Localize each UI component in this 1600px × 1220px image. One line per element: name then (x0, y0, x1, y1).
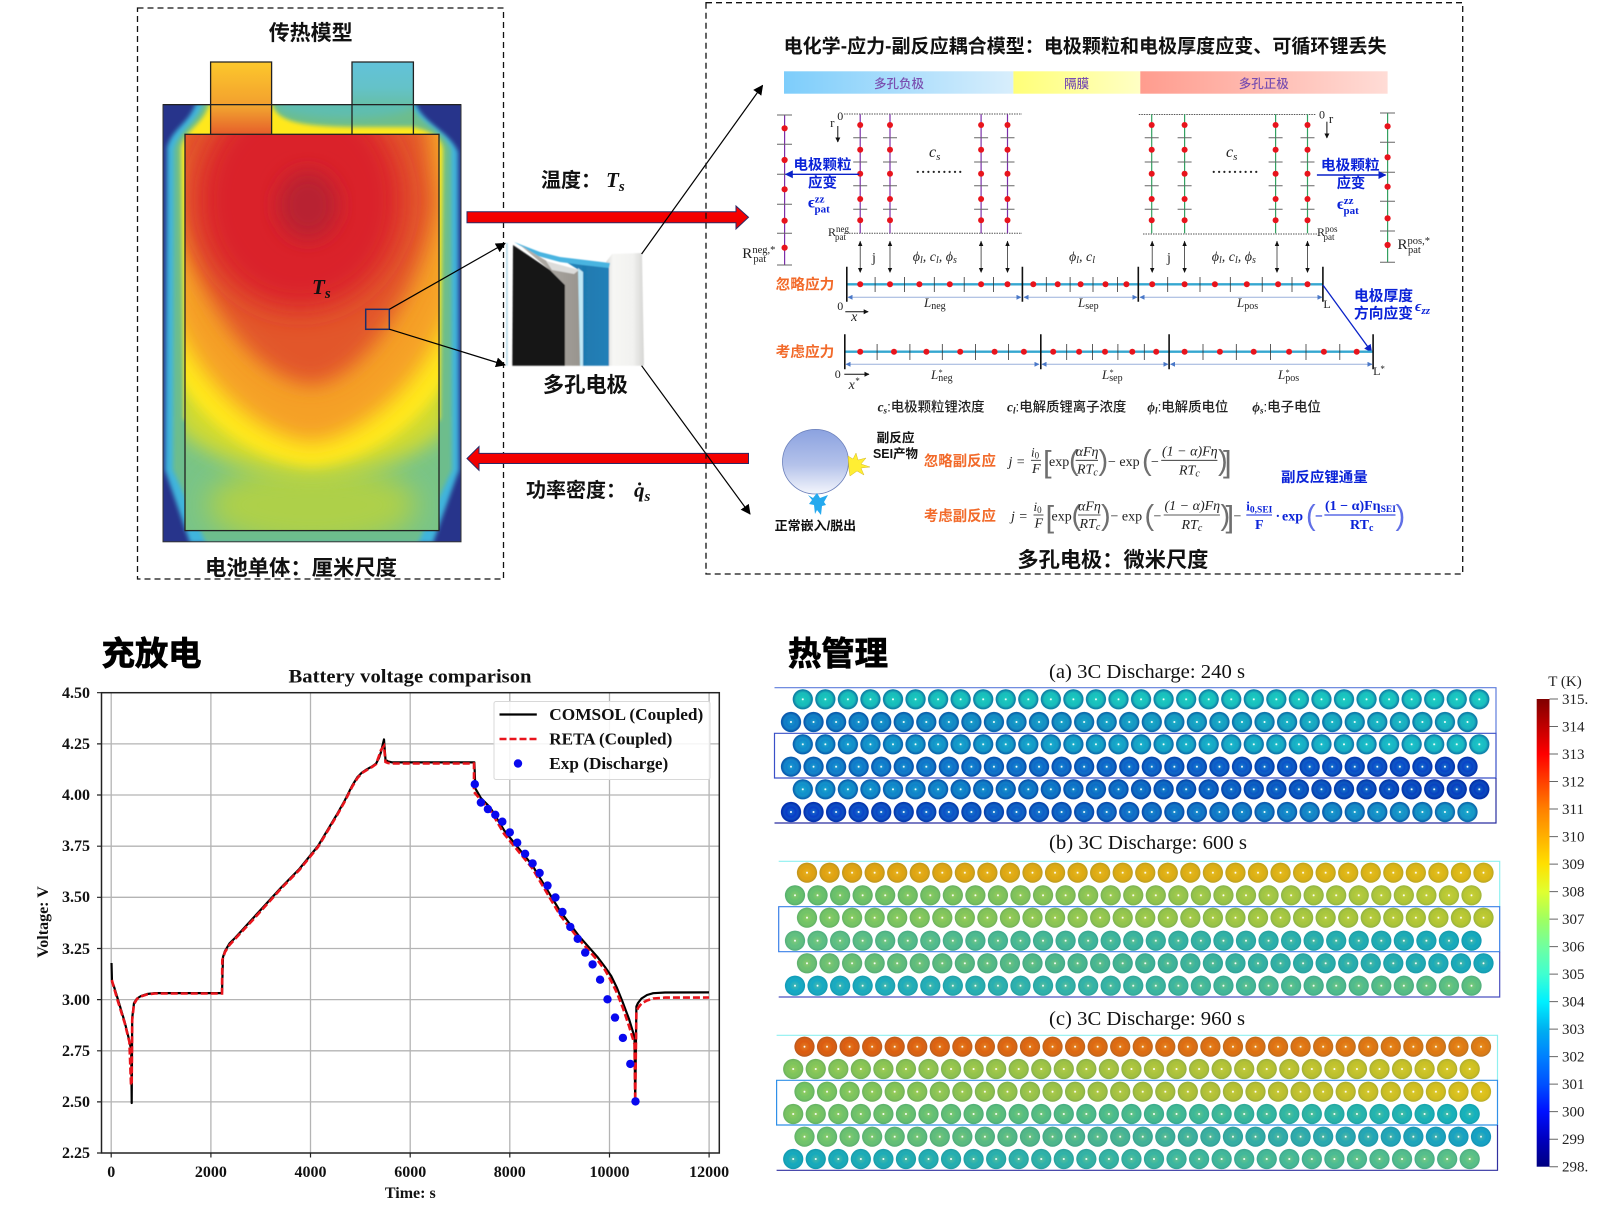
particle domain: positive electrode: pos (1325, 224, 1338, 234)
label: temperature Ts: 温度：T (541, 168, 619, 192)
y axis labels: 3.75 (62, 838, 90, 855)
coupling arrows and variables: , ϕ (939, 250, 953, 265)
cell rows b (784, 862, 1494, 997)
color bar labels: 298. (1562, 1160, 1588, 1176)
axis: electrode thickness with stress: 0 (835, 367, 841, 381)
label: thickness-direction strain: zz (1420, 305, 1431, 317)
equation: without side reaction: − (1108, 455, 1116, 470)
equation: without side reaction: − (1151, 455, 1159, 470)
panel: heat transfer model (138, 8, 504, 580)
axis: electrode thickness with stress: L (1278, 367, 1285, 382)
label: thickness-direction strain: ϵ (1415, 299, 1421, 315)
equation: SEI flux term: − (1315, 510, 1323, 524)
axis: electrode thickness with stress: x (849, 378, 855, 393)
icon: particle with SEI side reaction (775, 429, 918, 533)
label: ignoring side reaction: 忽略副反应 (924, 452, 996, 470)
axis: electrode thickness with stress: * (855, 376, 860, 386)
equation: without side reaction: exp (1049, 455, 1069, 470)
equation: without side reaction: ) (1218, 445, 1228, 477)
axis: electrode thickness without stress: L (1323, 297, 1331, 311)
axis: electrode thickness with stress: sep (1109, 373, 1123, 384)
color bar labels: 307 (1562, 912, 1585, 928)
arrow: temperature to electrode (467, 206, 748, 229)
module frames c (777, 1035, 1498, 1170)
chart legend (494, 702, 710, 780)
axes (97, 693, 719, 1158)
panel border: coupled model (706, 3, 1463, 574)
color bar labels: 304 (1562, 995, 1585, 1011)
icon: particle with SEI side reaction: 副反应 (877, 430, 915, 445)
label: considering stress: 考虑应力 (776, 343, 834, 361)
legend: symbols: c (878, 400, 888, 416)
particle domain: negative electrode: R (742, 246, 752, 262)
particle domain: negative electrode: 电极颗粒 (794, 156, 852, 172)
equation: with side reaction: c (1198, 523, 1203, 534)
legend: symbols: ϕ (1147, 400, 1158, 416)
heading: heat transfer model: 传热模型 (269, 22, 353, 45)
x axis labels: 8000 (494, 1164, 526, 1181)
cell outline (163, 105, 461, 542)
axis: electrode thickness without stress: L (924, 295, 931, 310)
equation: with side reaction: j = (1009, 510, 1028, 524)
module frames b (779, 861, 1500, 997)
arrow: zoom to electrode, top (389, 243, 505, 309)
coupling arrows and variables: j (1166, 251, 1171, 266)
label: power density: s (644, 489, 650, 505)
equation: with side reaction: ) (1101, 500, 1111, 532)
equation: SEI flux term: SEI (1381, 505, 1396, 515)
y axis labels (62, 685, 90, 1162)
color bar labels: 314 (1562, 720, 1585, 736)
equation: with side reaction: ) (1220, 500, 1230, 532)
heading: cell scale: 电池单体：厘米尺度 (205, 557, 397, 580)
equation: SEI flux term: (1 − α)Fη (1325, 499, 1381, 514)
color bar labels: 308 (1562, 885, 1584, 901)
equation: without side reaction: c (1195, 468, 1200, 480)
equation: with side reaction: − (1234, 510, 1242, 524)
axis: electrode thickness with stress: * (1285, 368, 1289, 377)
label: surface temperature Ts: T (312, 275, 325, 299)
label: temperature Ts: s (618, 179, 625, 195)
legend: symbols (878, 398, 1321, 416)
equation: SEI flux term: · (1276, 510, 1280, 524)
label: side reaction lithium flux: 副反应锂通量 (1281, 469, 1368, 485)
heading: thermal management: 热管理 (788, 635, 888, 672)
axis: electrode thickness without stress: pos (1244, 301, 1258, 312)
equation: with side reaction: F (1034, 516, 1044, 532)
particle domain: negative electrode (742, 109, 1022, 265)
axis: electrode thickness with stress: neg (938, 373, 953, 384)
equation: with side reaction: (1 − α)Fη (1164, 499, 1220, 514)
equation: SEI flux term: ) (1396, 500, 1405, 532)
coupling arrows and variables: l (920, 255, 923, 266)
x axis labels: 12000 (689, 1164, 729, 1181)
equation: without side reaction: (1 − α)Fη (1162, 444, 1218, 460)
color bar title: T (K) (1548, 674, 1582, 690)
particle domain: positive electrode: R (1317, 225, 1325, 239)
equation: with side reaction: ( (1072, 500, 1082, 532)
equation: without side reaction: ( (1142, 445, 1152, 477)
color bar labels: 313 (1562, 747, 1584, 763)
color bar labels: 305 (1562, 967, 1584, 983)
series: COMSOL coupled (112, 739, 709, 1103)
heading: charge and discharge: 充放电 (102, 635, 202, 672)
tabs (211, 62, 272, 105)
legend: symbols: :电解质电位 (1158, 398, 1228, 414)
coupling arrows and variables: l (1076, 255, 1079, 266)
color bar: temperature scale (1537, 674, 1588, 1176)
icon: particle with SEI side reaction: SEI产物 (873, 446, 918, 461)
legend: symbols: ϕ (1252, 400, 1264, 416)
equation: without side reaction: 0 (1035, 450, 1040, 460)
title b: (b) 3C Discharge: 600 s (1049, 832, 1247, 854)
y axis labels: 4.00 (62, 787, 90, 804)
label: porous electrode: 多孔电极 (543, 374, 628, 397)
axis: electrode thickness with stress: L (931, 367, 938, 382)
equation: with side reaction: exp (1122, 510, 1142, 524)
equation: without side reaction: αFη (1076, 445, 1099, 460)
chart legend: COMSOL (Coupled) (549, 705, 703, 724)
equation: without side reaction: RT (1077, 462, 1093, 478)
particle domain: negative electrode: zz (815, 194, 825, 206)
equation: with side reaction: RT (1182, 518, 1198, 533)
label: considering side reaction: 考虑副反应 (924, 507, 996, 525)
heading: electrode scale: 多孔电极：微米尺度 (1017, 549, 1208, 572)
color bar labels: 310 (1562, 830, 1584, 846)
equation: with side reaction: 0 (1037, 505, 1042, 515)
particle domain: positive electrode (1139, 108, 1430, 262)
series: RETA coupled (112, 746, 709, 1101)
particle domain: negative electrode: pat (753, 254, 766, 265)
legend: symbols: :电子电位 (1263, 398, 1321, 414)
icon: porous electrode (506, 242, 644, 366)
equation: with side reaction: [ (1046, 499, 1054, 534)
equation: with side reaction: αFη (1078, 500, 1101, 514)
x axis title: Time: s (385, 1185, 436, 1202)
particle domain: negative electrode: 应变 (808, 174, 837, 190)
y axis labels: 2.75 (62, 1043, 90, 1060)
axis: electrode thickness without stress: 0 (837, 299, 843, 313)
x axis labels: 4000 (294, 1164, 326, 1181)
color bar labels: 303 (1562, 1022, 1584, 1038)
equation: with side reaction: i (1034, 499, 1037, 514)
x axis labels: 10000 (590, 1164, 630, 1181)
axis: electrode thickness without stress: L (1237, 295, 1244, 310)
particle domain: positive electrode: 应变 (1337, 175, 1365, 191)
chart title: Battery voltage comparison (288, 666, 532, 688)
equation: with side reaction (1009, 499, 1242, 534)
arrow: electrode to coupled model bottom (642, 366, 750, 514)
y axis labels: 3.25 (62, 941, 90, 958)
color bar labels: 302 (1562, 1050, 1584, 1066)
equation: without side reaction: RT (1179, 464, 1195, 478)
equation: without side reaction: i (1031, 444, 1035, 460)
x axis labels (107, 1164, 729, 1181)
chart: battery voltage comparison (35, 666, 729, 1202)
particle domain: negative electrode: R (828, 225, 836, 239)
particle domain: positive electrode: 电极颗粒 (1321, 157, 1380, 173)
y axis labels: 4.25 (62, 736, 90, 753)
particle domain: positive electrode: pat (1324, 232, 1335, 242)
label: power density: 功率密度： q̇ (526, 478, 644, 502)
particle domain: negative electrode: neg (836, 224, 850, 234)
particle domain: positive electrode: s (1233, 151, 1237, 163)
label: thickness-direction strain (1354, 287, 1431, 322)
region band: negative, separator, positive (784, 71, 1388, 94)
particle domain: negative electrode: pat (835, 232, 847, 242)
particle domain: positive electrode: ......... (1212, 162, 1258, 177)
region band: negative, separator, positive: 多孔正极 (1239, 76, 1289, 91)
coupling arrows and variables: l (936, 255, 939, 266)
color bar labels: 300 (1562, 1105, 1584, 1121)
coupling arrows and variables: , ϕ (1238, 250, 1252, 265)
y axis title: Voltage: V (35, 886, 52, 958)
cell rows a (780, 688, 1490, 823)
particle domain: positive electrode: ϵ (1337, 196, 1344, 213)
panel border: heat transfer model (138, 8, 504, 579)
equation: SEI flux term: exp (1282, 510, 1303, 524)
title c: (c) 3C Discharge: 960 s (1049, 1008, 1245, 1030)
equation: without side reaction: [ (1043, 444, 1052, 479)
equation: SEI flux term: RT (1350, 518, 1369, 533)
label: ignoring stress: 忽略应力 (776, 276, 834, 294)
panel: coupled electrochemical model (706, 3, 1463, 574)
heading: coupled model title: 电化学-应力-副反应耦合模型：电极颗粒和电极厚度应变、可循环锂丢失 (784, 34, 1387, 58)
axis: electrode thickness with stress: * (1380, 364, 1385, 374)
label: surface temperature Ts: s (324, 286, 331, 302)
coupling arrows and variables: ϕ (1069, 250, 1076, 265)
region band: negative, separator, positive: 多孔负极 (874, 76, 924, 91)
x axis labels: 0 (107, 1164, 115, 1181)
axis: electrode thickness without stress: neg (931, 301, 946, 312)
axis: electrode thickness with stress: * (938, 368, 942, 377)
y axis labels: 4.50 (62, 685, 90, 702)
axis: electrode thickness without stress (837, 267, 1331, 325)
particle domain: negative electrode: pat (814, 204, 830, 216)
axis: electrode thickness with stress (835, 334, 1385, 393)
chart legend: Exp (Discharge) (549, 754, 668, 773)
icon: particle with SEI side reaction: 正常嵌入/脱出 (775, 518, 856, 533)
arrow: zoom to electrode, bottom (389, 329, 505, 365)
arrow: power density to cell (467, 447, 748, 470)
legend: symbols: l (1013, 406, 1016, 416)
equation: without side reaction (1006, 444, 1232, 480)
equation: without side reaction: exp (1119, 455, 1140, 470)
equation: with side reaction: ] (1226, 499, 1234, 534)
particle domain: positive electrode: R (1398, 237, 1408, 253)
grid (102, 693, 719, 1153)
equation: without side reaction: j = (1006, 455, 1025, 470)
particle domain: positive electrode: c (1226, 144, 1233, 161)
axis: electrode thickness with stress: L (1373, 364, 1380, 378)
coupling arrows and variables: , c (1079, 250, 1093, 265)
color bar labels: 306 (1562, 940, 1585, 956)
arrow: thickness strain (1323, 285, 1372, 352)
region band: negative, separator, positive: 隔膜 (1064, 76, 1089, 91)
axis: electrode thickness without stress: L (1078, 295, 1085, 310)
particle domain: positive electrode: r (1329, 111, 1334, 126)
particle domain: positive electrode: pos,* (1408, 236, 1430, 247)
equation: SEI flux term: c (1369, 523, 1374, 534)
particle domain: negative electrode: ......... (916, 162, 962, 177)
chart legend: RETA (Coupled) (549, 730, 672, 748)
equation: without side reaction: ] (1223, 444, 1232, 479)
equation: with side reaction: RT (1080, 517, 1096, 532)
particle domain: negative electrode: r (830, 115, 835, 130)
arrow: electrode to coupled model top (642, 86, 762, 254)
axis: electrode thickness without stress: sep (1085, 301, 1099, 312)
cell rows c (782, 1036, 1492, 1170)
particle domain: positive electrode: zz (1344, 195, 1354, 207)
x axis labels: 6000 (394, 1164, 426, 1181)
legend: symbols: l (1155, 406, 1158, 416)
coupling arrows and variables (858, 241, 1310, 273)
panel c: 3C discharge 960 s (777, 1008, 1498, 1170)
equation: without side reaction: ) (1098, 445, 1108, 477)
battery temperature field (163, 62, 461, 547)
particle domain: negative electrode: s (936, 151, 940, 163)
equation: with side reaction: c (1096, 522, 1101, 533)
title a: (a) 3C Discharge: 240 s (1049, 661, 1245, 683)
zoom window on cell (366, 309, 389, 329)
legend: symbols: c (1007, 400, 1016, 416)
color bar labels: 301 (1562, 1077, 1584, 1093)
color bar labels: 299 (1562, 1132, 1584, 1148)
particle domain: negative electrode: 0 (837, 109, 843, 123)
equation: SEI flux term (1246, 498, 1405, 534)
legend: symbols: :电极颗粒锂浓度 (887, 400, 985, 414)
coupling arrows and variables: j (871, 251, 876, 266)
axis: electrode thickness with stress: pos (1285, 373, 1299, 384)
particle domain: positive electrode: pat (1344, 205, 1359, 217)
coupling arrows and variables: l (1092, 255, 1095, 266)
equation: SEI flux term: ( (1306, 500, 1316, 532)
coupling arrows and variables: , c (1222, 250, 1236, 265)
particle domain: negative electrode: ϵ (808, 194, 815, 212)
coupling arrows and variables: ϕ (1212, 250, 1219, 265)
axis: electrode thickness without stress: x (850, 310, 858, 325)
particle domain: negative electrode: c (929, 144, 936, 161)
equation: with side reaction: − (1110, 510, 1118, 524)
color bar labels: 315. (1562, 692, 1588, 708)
color bar labels (1562, 692, 1588, 1176)
axis: electrode thickness with stress: L (1102, 367, 1109, 382)
equation: SEI flux term: i (1246, 498, 1250, 514)
axis: electrode thickness with stress: * (1109, 368, 1113, 377)
coupling arrows and variables: s (953, 255, 957, 266)
y axis labels: 3.00 (62, 992, 90, 1009)
coupling arrows and variables: ϕ (913, 250, 920, 265)
panel b: 3C discharge 600 s (779, 832, 1500, 997)
coupling arrows and variables: , c (923, 250, 937, 265)
legend: symbols: s (883, 406, 888, 416)
x axis labels: 2000 (195, 1164, 227, 1181)
coupling arrows and variables: l (1219, 255, 1222, 266)
y axis labels: 2.25 (62, 1145, 90, 1162)
panel a: 3C discharge 240 s (774, 661, 1496, 823)
y axis labels: 2.50 (62, 1094, 90, 1111)
module frames a (774, 688, 1496, 823)
coupling arrows and variables: l (1235, 255, 1238, 266)
equation: without side reaction: c (1093, 468, 1098, 478)
equation: with side reaction: exp (1052, 510, 1072, 524)
label: thickness-direction strain: 电极厚度 (1354, 287, 1414, 305)
series: experimental discharge (471, 780, 640, 1106)
equation: SEI flux term: F (1255, 518, 1264, 533)
particle domain: negative electrode: neg,* (752, 245, 775, 256)
equation: without side reaction: F (1031, 462, 1041, 477)
particle domain: positive electrode: pat (1408, 245, 1421, 256)
color bar labels: 312 (1562, 774, 1584, 790)
y axis labels: 3.50 (62, 889, 90, 906)
equation: with side reaction: − (1154, 510, 1162, 524)
label: thickness-direction strain: 方向应变 (1354, 304, 1413, 322)
color bar labels: 311 (1562, 802, 1584, 818)
equation: with side reaction: ( (1144, 500, 1154, 532)
electrode outline (185, 134, 439, 531)
legend: symbols: s (1259, 406, 1264, 416)
equation: without side reaction: ( (1069, 445, 1079, 477)
coupling arrows and variables: s (1252, 255, 1256, 266)
equation: SEI flux term: 0,SEI (1250, 506, 1273, 516)
particle domain: positive electrode: 0 (1319, 108, 1325, 122)
legend: symbols: :电解质锂离子浓度 (1015, 398, 1126, 414)
color bar labels: 309 (1562, 857, 1584, 873)
